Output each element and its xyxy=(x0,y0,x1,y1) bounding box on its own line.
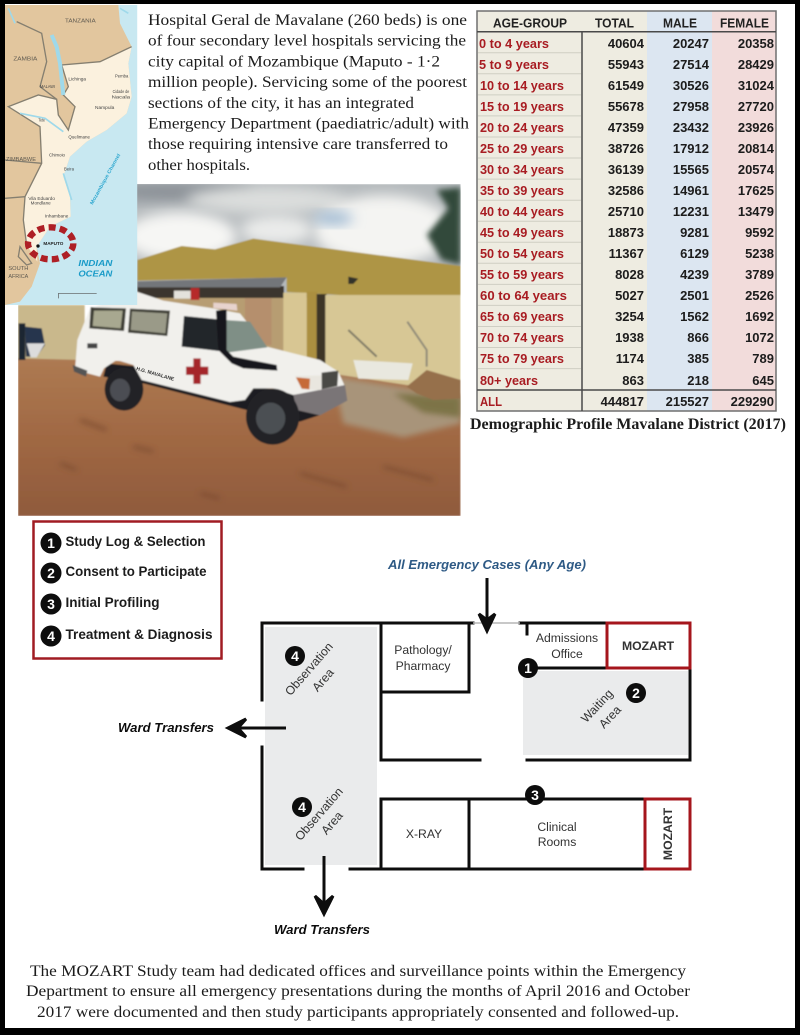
label: all emergency cases: All Emergency Cases (Any Age) xyxy=(387,557,586,572)
intro paragraph: Emergency Department (paediatric/adult) with xyxy=(148,116,469,132)
female column xyxy=(731,36,775,409)
female column: 9592 xyxy=(745,225,774,240)
step marker 3 xyxy=(525,785,545,805)
country labels: SOUTH xyxy=(8,266,28,272)
total column: 32586 xyxy=(608,183,644,198)
age group labels: 75 to 79 years xyxy=(480,351,564,366)
table header: MALE xyxy=(663,16,697,30)
age group labels: 65 to 69 years xyxy=(480,309,564,324)
female column: 1072 xyxy=(745,330,774,345)
table header: TOTAL xyxy=(595,16,634,30)
city labels: Chimoio xyxy=(49,152,66,157)
age group labels: 55 to 59 years xyxy=(480,267,564,282)
city labels: Vila Eduardo xyxy=(28,196,56,201)
table header: FEMALE xyxy=(720,16,769,30)
table caption: Demographic Profile Mavalane District (2017) xyxy=(470,416,786,433)
male column: 4239 xyxy=(680,267,709,282)
age group labels: 5 to 9 years xyxy=(479,57,549,72)
male column: 218 xyxy=(687,373,709,388)
total column: 61549 xyxy=(608,78,644,93)
legend item 1: 1 xyxy=(47,535,55,551)
total column: 11367 xyxy=(609,246,644,261)
vehicle body xyxy=(75,292,345,402)
total column: 1174 xyxy=(616,351,645,366)
map of Mozambique: MAPUTO xyxy=(43,241,64,246)
ambulance lettering: H.G. MAVALANE xyxy=(135,366,175,383)
clinical rooms label xyxy=(537,820,577,849)
total column: 55943 xyxy=(608,57,644,72)
male column: 866 xyxy=(687,330,709,345)
age group labels: 40 to 44 years xyxy=(480,204,564,219)
observation area label lower: Area xyxy=(318,809,346,837)
female column: 13479 xyxy=(738,204,774,219)
total column: 1938 xyxy=(615,330,644,345)
step marker 4 lower xyxy=(292,797,312,817)
female column: 17625 xyxy=(738,183,774,198)
legend item 1: Study Log & Selection xyxy=(66,534,206,549)
legend item 4 xyxy=(40,626,212,646)
total column: 47359 xyxy=(608,120,644,135)
step marker 3: 3 xyxy=(531,787,539,803)
country labels: TANZANIA xyxy=(65,19,96,25)
female column: 645 xyxy=(752,373,774,388)
intro paragraph: other hospitals. xyxy=(148,157,250,174)
male column: 9281 xyxy=(680,225,709,240)
waiting area shading xyxy=(523,671,688,755)
country labels: AFRICA xyxy=(8,274,29,280)
map of Mozambique: INDIAN xyxy=(78,258,113,268)
total column: 444817 xyxy=(601,394,644,409)
observation area label upper: Area xyxy=(309,666,337,694)
clinical rooms label: Rooms xyxy=(538,835,576,849)
age group labels: ALL xyxy=(480,394,502,409)
legend item 2 xyxy=(40,562,207,584)
city labels: Lichinga xyxy=(68,77,87,82)
total column: 8028 xyxy=(615,267,644,282)
observation area label lower: Observation xyxy=(292,785,346,843)
city labels: Mondlane xyxy=(31,201,51,206)
demographic table xyxy=(477,11,776,411)
city labels: Tete xyxy=(38,117,45,122)
city labels xyxy=(28,73,131,218)
city labels: Nampula xyxy=(95,105,115,110)
observation area label upper: Observation xyxy=(282,640,336,698)
city labels: Pemba xyxy=(115,73,129,78)
age group labels: 15 to 19 years xyxy=(480,99,564,114)
male column: 12231 xyxy=(673,204,709,219)
male column: 27958 xyxy=(673,99,709,114)
step marker 2 xyxy=(626,683,646,703)
photo: ambulance outside hospital xyxy=(18,182,461,516)
step marker 2: 2 xyxy=(632,685,640,701)
male column: 215527 xyxy=(666,394,709,409)
female column: 789 xyxy=(752,351,774,366)
label: left ward transfers: Ward Transfers xyxy=(118,720,214,735)
bottom paragraph xyxy=(26,963,691,1021)
step marker 1 xyxy=(518,658,538,678)
legend item 4: 4 xyxy=(47,628,55,644)
total column: 5027 xyxy=(615,288,644,303)
red dashed location marker xyxy=(28,227,73,259)
bottom paragraph: 2017 were documented and then study participants appropriately consented and followed-up. xyxy=(37,1004,679,1021)
age group labels: 50 to 54 years xyxy=(480,246,564,261)
male column: 27514 xyxy=(673,57,710,72)
female column: 27720 xyxy=(738,99,774,114)
clinical rooms label: Clinical xyxy=(537,820,577,834)
total column: 55678 xyxy=(608,99,644,114)
female column: 28429 xyxy=(738,57,774,72)
country labels: MALAWI xyxy=(40,84,55,89)
chassis shadow xyxy=(103,363,320,422)
waiting area label: Area xyxy=(596,703,624,731)
legend item 2: Consent to Participate xyxy=(66,564,207,579)
MOZART office bottom xyxy=(645,799,690,869)
male column xyxy=(666,36,710,409)
pathology pharmacy label xyxy=(394,643,452,673)
legend item 3: 3 xyxy=(47,596,55,612)
city labels: Nacala xyxy=(112,95,131,100)
female column: 1692 xyxy=(745,309,774,324)
country labels: ZIMBABWE xyxy=(6,157,36,163)
legend panel xyxy=(34,522,222,658)
legend item 4: Treatment & Diagnosis xyxy=(66,627,212,642)
age group labels: 0 to 4 years xyxy=(479,36,549,51)
total column: 36139 xyxy=(608,162,644,177)
male column: 15565 xyxy=(673,162,709,177)
age group labels: 60 to 64 years xyxy=(480,288,567,303)
bottom paragraph: The MOZART Study team had dedicated offices and surveillance points within the Emergency xyxy=(30,963,686,980)
intro paragraph: Hospital Geral de Mavalane (260 beds) is one xyxy=(148,12,467,29)
map of Mozambique: Mozambique Channel xyxy=(89,152,123,206)
female column: 23926 xyxy=(738,120,774,135)
age group labels: 70 to 74 years xyxy=(480,330,564,345)
female column: 20814 xyxy=(738,141,775,156)
intro paragraph: those requiring intensive care transferred to xyxy=(148,136,448,153)
female column: 5238 xyxy=(745,246,774,261)
intro paragraph: sections of the city, it has an integrated xyxy=(148,95,414,112)
intro paragraph: million people). Servicing some of the poorest xyxy=(148,74,468,91)
age group labels: 45 to 49 years xyxy=(480,225,564,240)
map of Mozambique: OCEAN xyxy=(78,268,113,278)
intro paragraph: of four secondary level hospitals servicing the xyxy=(148,33,466,50)
observation area shading xyxy=(265,627,377,865)
country labels: ZAMBIA xyxy=(13,57,38,63)
total column: 40604 xyxy=(608,36,645,51)
arrow: bottom ward transfer xyxy=(315,856,333,914)
legend item 2: 2 xyxy=(47,565,55,581)
female column: 3789 xyxy=(745,267,774,282)
age group labels: 80+ years xyxy=(480,373,538,388)
arrow: left ward transfer xyxy=(228,719,286,737)
pathology pharmacy label: Pharmacy xyxy=(396,659,451,673)
total column: 25710 xyxy=(608,204,644,219)
table header xyxy=(493,16,769,30)
step marker 1: 1 xyxy=(524,660,532,676)
admissions office label xyxy=(536,631,598,661)
MOZART office top: MOZART xyxy=(622,639,675,653)
total column: 18873 xyxy=(608,225,644,240)
city labels: Cidade de xyxy=(113,89,130,94)
arrow: emergency entry xyxy=(479,578,495,631)
age group labels: 30 to 34 years xyxy=(480,162,564,177)
female column: 2526 xyxy=(745,288,774,303)
map of Mozambique xyxy=(5,5,137,305)
male column: 20247 xyxy=(673,36,709,51)
label: bottom ward transfers: Ward Transfers xyxy=(274,922,370,937)
bottom paragraph: Department to ensure all emergency presentations during the months of April 2016 and October xyxy=(26,983,691,1000)
female column: 20358 xyxy=(738,36,774,51)
legend item 1 xyxy=(40,532,206,554)
age group labels: 35 to 39 years xyxy=(480,183,564,198)
male column: 17912 xyxy=(673,141,709,156)
waiting area label: Waiting xyxy=(578,687,616,725)
intro paragraph xyxy=(148,12,469,174)
admissions office label: Admissions xyxy=(536,631,598,645)
total column: 38726 xyxy=(608,141,644,156)
intro paragraph: city capital of Mozambique (Maputo - 1·2 xyxy=(148,53,440,70)
admissions office label: Office xyxy=(551,647,583,661)
total column: 863 xyxy=(622,373,644,388)
table header: AGE-GROUP xyxy=(493,16,567,30)
female column: 20574 xyxy=(738,162,775,177)
male column: 385 xyxy=(687,351,709,366)
female column: 229290 xyxy=(731,394,774,409)
male column: 6129 xyxy=(680,246,709,261)
step marker 4 lower: 4 xyxy=(298,799,306,815)
legend item 3 xyxy=(40,594,160,614)
age group labels: 25 to 29 years xyxy=(480,141,564,156)
male column: 30526 xyxy=(673,78,709,93)
pathology pharmacy label: Pathology/ xyxy=(394,643,452,657)
age group labels xyxy=(479,36,567,409)
female column: 31024 xyxy=(738,78,775,93)
legend item 3: Initial Profiling xyxy=(66,595,160,610)
x-ray label: X-RAY xyxy=(406,827,442,841)
male column: 2501 xyxy=(680,288,709,303)
country labels xyxy=(6,19,96,280)
age group labels: 10 to 14 years xyxy=(480,78,564,93)
age group labels: 20 to 24 years xyxy=(480,120,564,135)
city labels: Inhambane xyxy=(45,213,69,218)
male column: 23432 xyxy=(673,120,709,135)
step marker 4 upper xyxy=(285,646,305,666)
city labels: Beira xyxy=(64,167,75,172)
male column: 14961 xyxy=(673,183,709,198)
male column: 1562 xyxy=(680,309,709,324)
MOZART office bottom: MOZART xyxy=(661,807,675,860)
step marker 4 upper: 4 xyxy=(291,648,299,664)
city labels: Quelimane xyxy=(68,135,91,140)
floor plan xyxy=(118,557,690,937)
total column xyxy=(601,36,645,409)
total column: 3254 xyxy=(615,309,645,324)
MOZART office top xyxy=(607,623,690,668)
